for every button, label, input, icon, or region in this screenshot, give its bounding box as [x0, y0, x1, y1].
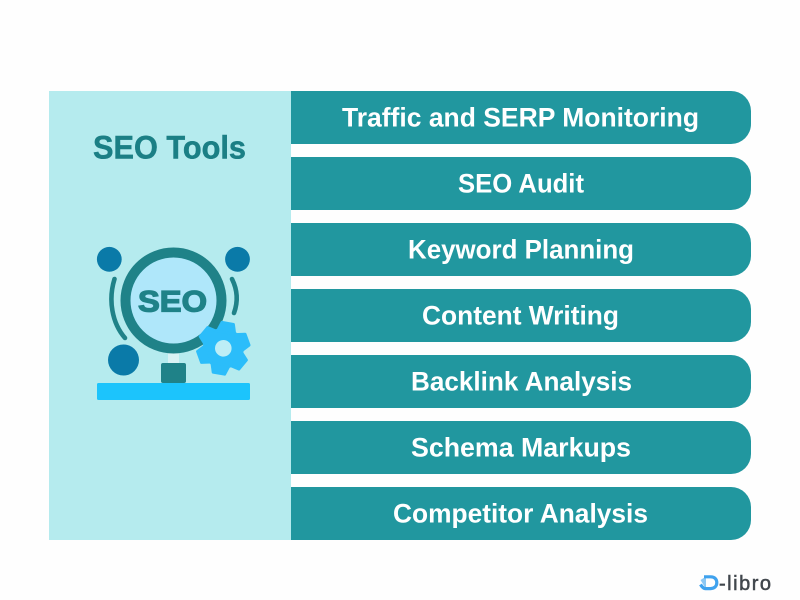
bar: SEO Audit	[291, 157, 751, 210]
icon: SEO lens text: SEO	[138, 286, 207, 318]
icon: right signal arc	[232, 279, 237, 313]
icon: handle	[161, 363, 186, 383]
icon: bottom left dot	[108, 344, 139, 376]
icon: top left dot	[97, 247, 122, 272]
bar: Competitor Analysis	[291, 487, 751, 540]
icon: stand base	[97, 383, 250, 400]
bar: Schema Markups: Schema Markups	[411, 433, 631, 463]
bar: Schema Markups	[291, 421, 751, 474]
bar: Backlink Analysis	[291, 355, 751, 408]
bar: Keyword Planning	[291, 223, 751, 276]
icon: logo D mark	[700, 576, 717, 589]
panel: SEO Tools left panel	[49, 91, 291, 540]
bar: Traffic and SERP Monitoring	[291, 91, 751, 144]
bar: Content Writing	[291, 289, 751, 342]
bar: Traffic and SERP Monitoring: Traffic and SERP Monitoring	[342, 103, 699, 133]
bar: Keyword Planning: Keyword Planning	[408, 235, 634, 265]
bar: Backlink Analysis: Backlink Analysis	[411, 367, 632, 397]
heading: SEO Tools: SEO Tools	[93, 130, 246, 166]
bar: Competitor Analysis: Competitor Analysis	[393, 499, 648, 529]
icon: gear	[193, 319, 254, 378]
icon: left signal arc	[111, 279, 125, 338]
icon: SEO magnifying glass with gear	[97, 247, 254, 400]
bar: Content Writing: Content Writing	[422, 301, 619, 331]
icon: top right dot	[225, 247, 250, 272]
icon: handle neck	[168, 353, 179, 364]
bar: SEO Audit: SEO Audit	[458, 169, 584, 199]
logo wordmark: -libro	[719, 573, 771, 595]
logo: D-libro	[700, 573, 771, 595]
icon: magnifier lens	[126, 252, 222, 348]
